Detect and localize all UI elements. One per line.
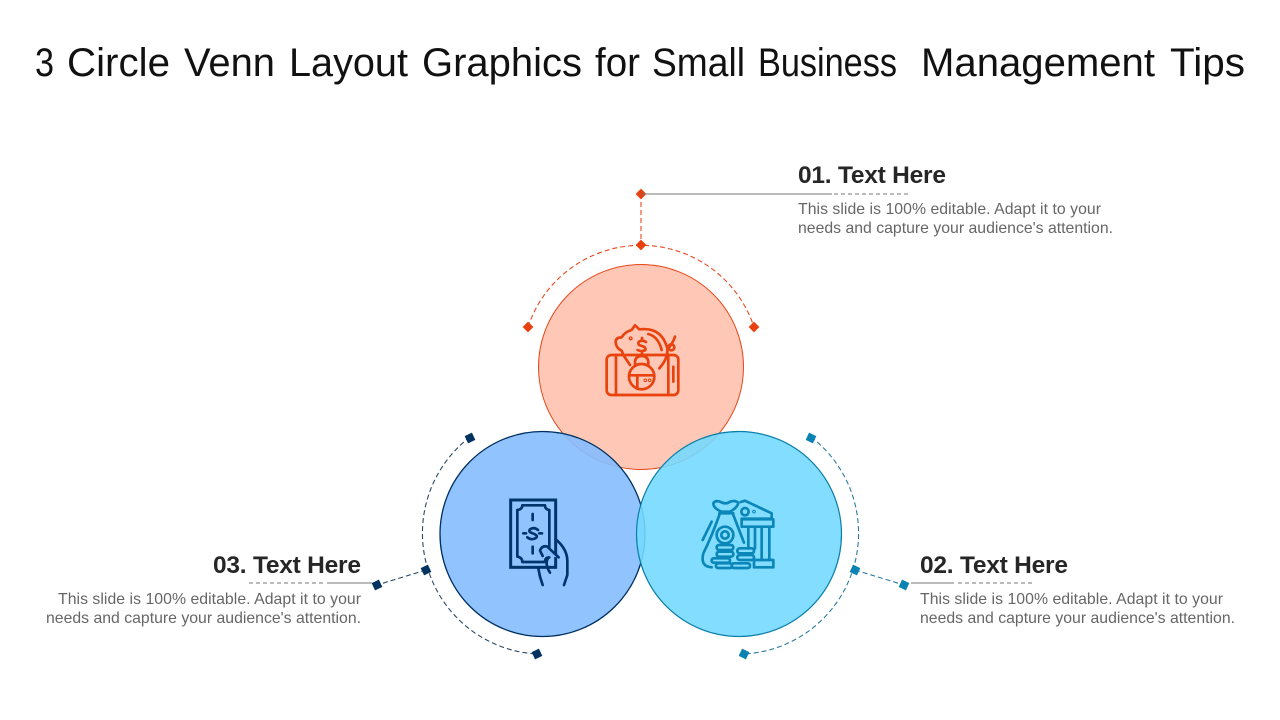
- callout: 02 text: [911, 552, 1235, 627]
- icon: hand holding banknote: [511, 500, 567, 585]
- title: Management: [921, 41, 1155, 85]
- title: Graphics: [422, 41, 582, 85]
- callout: 02 text: 02. Text Here: [920, 552, 1068, 579]
- title: Business: [758, 41, 897, 85]
- title: for: [595, 41, 640, 85]
- markers: left: [372, 433, 542, 659]
- title: Layout: [289, 41, 408, 85]
- callout: 01 text: This slide is 100% editable. Adapt it to your: [798, 201, 1101, 218]
- callout: 02 text: This slide is 100% editable. Adapt it to your: [920, 591, 1223, 608]
- icon: money bag, coins and bank: [703, 501, 773, 568]
- title: Circle: [67, 41, 170, 85]
- title: [35, 41, 1245, 85]
- callout: 02 text: needs and capture your audience's attention.: [920, 610, 1235, 627]
- icon: piggy bank with lock on phone: [607, 325, 678, 395]
- callout: 03 text: needs and capture your audience's attention.: [46, 610, 361, 627]
- markers: top: [523, 189, 759, 332]
- callout: 01 text: 01. Text Here: [798, 162, 946, 189]
- callout: 03 text: 03. Text Here: [213, 552, 361, 579]
- callout arc: left: [377, 437, 537, 654]
- callout: 01 text: [641, 162, 1113, 237]
- title: Tips: [1170, 41, 1245, 85]
- title: 3: [35, 41, 54, 85]
- title: Venn: [184, 41, 275, 85]
- circle: top orange: [538, 264, 744, 470]
- callout: 03 text: This slide is 100% editable. Adapt it to your: [58, 591, 361, 608]
- callout: 03 text: [46, 552, 372, 627]
- callout: 01 text: needs and capture your audience's attention.: [798, 220, 1113, 237]
- callout arc: top: [528, 194, 754, 327]
- callout arc: right: [744, 437, 904, 654]
- circle: left blue: [440, 432, 645, 636]
- circle: right cyan: [636, 432, 842, 636]
- title: Small: [652, 41, 745, 85]
- markers: right: [739, 433, 909, 659]
